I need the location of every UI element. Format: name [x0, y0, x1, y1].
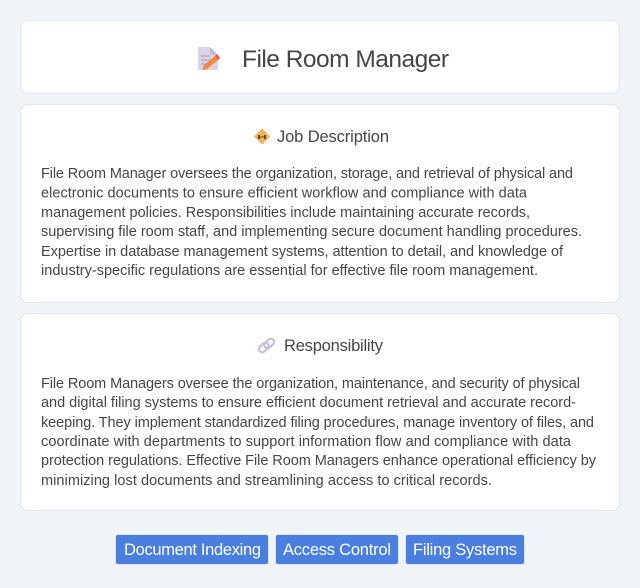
icon: chain link — [258, 337, 275, 354]
text block: responsibility: File Room Managers oversee the organization, maintenance, and security of physical — [41, 376, 580, 392]
heading: responsibility: Responsibility — [284, 337, 384, 355]
text block: job description — [41, 166, 582, 279]
text block: responsibility — [41, 376, 597, 489]
text block: job description: File Room Manager oversees the organization, storage, and retrieval of physical and — [41, 166, 573, 182]
tag: access control — [276, 534, 398, 564]
panel: job description — [20, 104, 620, 302]
text block: job description: management policies. Responsibilities include maintaining accurate records, — [41, 205, 530, 221]
text block: job description: industry-specific regulations are essential for effective file room management. — [41, 263, 538, 279]
text block: job description: Expertise in database management systems, attention to detail, and knowledge of — [41, 244, 564, 260]
text block: responsibility: keeping. They implement standardized filing procedures, manage inventory of files, and — [41, 415, 594, 431]
tag: filing systems: Filing Systems — [413, 541, 517, 559]
text block: responsibility: protection regulations. Effective File Room Managers enhance operational efficiency by — [41, 453, 597, 469]
text block: responsibility: minimizing lost documents and streamlining access to critical records. — [41, 473, 492, 489]
icon: job description diamond — [254, 128, 270, 144]
panel: responsibility — [20, 314, 620, 510]
heading: job description: Job Description — [277, 128, 389, 146]
text block: job description: electronic documents to ensure efficient workflow and compliance with data — [41, 186, 528, 202]
tag: filing systems — [406, 534, 524, 564]
tag: document indexing: Document Indexing — [124, 541, 261, 559]
text block: job description: supervising file room staff, and implementing secure document handling procedures. — [41, 224, 582, 240]
tag: document indexing — [116, 534, 268, 564]
text block: responsibility: and digital filing systems to ensure efficient document retrieval and accurate record- — [41, 395, 576, 411]
icon: document with pencil — [198, 47, 220, 70]
tag: access control: Access Control — [283, 541, 391, 559]
panel: title header — [20, 20, 620, 94]
title: File Room Manager — [242, 46, 449, 73]
text block: responsibility: coordinate with departments to support information flow and compliance with data — [41, 434, 572, 450]
